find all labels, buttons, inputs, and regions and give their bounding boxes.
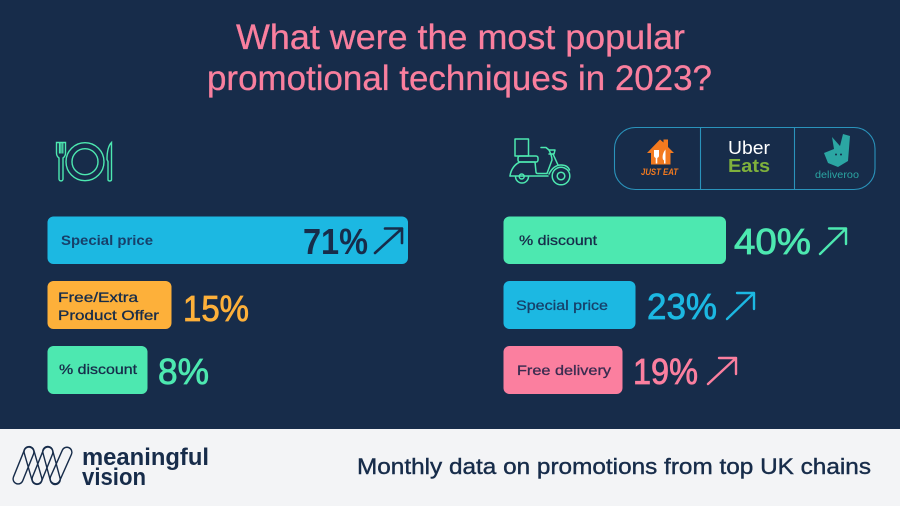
bar: special price 71%: Special price [61,232,153,248]
bar: free delivery 19%: 19% [633,351,698,392]
bar: free/extra product offer 15%: Product Offer [58,307,159,323]
bar: % discount 40% [504,216,846,264]
logo: Uber Eats [728,137,770,176]
icon: delivery scooter [510,139,570,185]
logo: Meaningful Vision: meaningful [82,444,209,471]
bar: special price 23% [504,281,754,329]
footer caption: Monthly data on promotions from top UK chains [357,454,871,479]
logo: Just Eat: JUST EAT [641,167,679,177]
title [207,18,712,98]
title: What were the most popular [236,18,685,57]
icon: plate and cutlery [56,142,112,181]
bar: % discount 8% [48,346,209,394]
panel: restaurant promotions [48,142,408,394]
bar: special price 71%: 71% [303,221,368,262]
logo panel: delivery partners [614,128,875,190]
bar: special price 23%: 23% [647,286,717,327]
logo: Uber Eats: Uber [728,137,770,158]
title: promotional techniques in 2023? [207,59,712,98]
logo: Uber Eats: Eats [728,155,770,176]
bar: special price 23%: Special price [516,297,608,313]
bar: free delivery 19%: Free delivery [517,362,611,378]
bar: free/extra product offer 15%: 15% [183,288,249,329]
logo: Deliveroo: deliveroo [815,169,859,181]
logo: Just Eat [641,140,679,177]
bar: free/extra product offer 15%: Free/Extra [58,289,138,305]
bar: free/extra product offer 15% [48,281,249,329]
bar: free delivery 19% [504,346,736,394]
bar: special price 71% [48,216,408,264]
bar: % discount 8%: 8% [158,351,209,392]
logo: Meaningful Vision [12,444,209,491]
footer [0,429,900,506]
bar: % discount 40%: % discount [519,232,597,248]
logo: Meaningful Vision: vision [82,464,146,491]
bar: % discount 8%: % discount [59,361,137,377]
logo: Deliveroo [815,134,859,181]
panel: delivery promotions [504,128,875,394]
bar: % discount 40%: 40% [734,221,811,262]
